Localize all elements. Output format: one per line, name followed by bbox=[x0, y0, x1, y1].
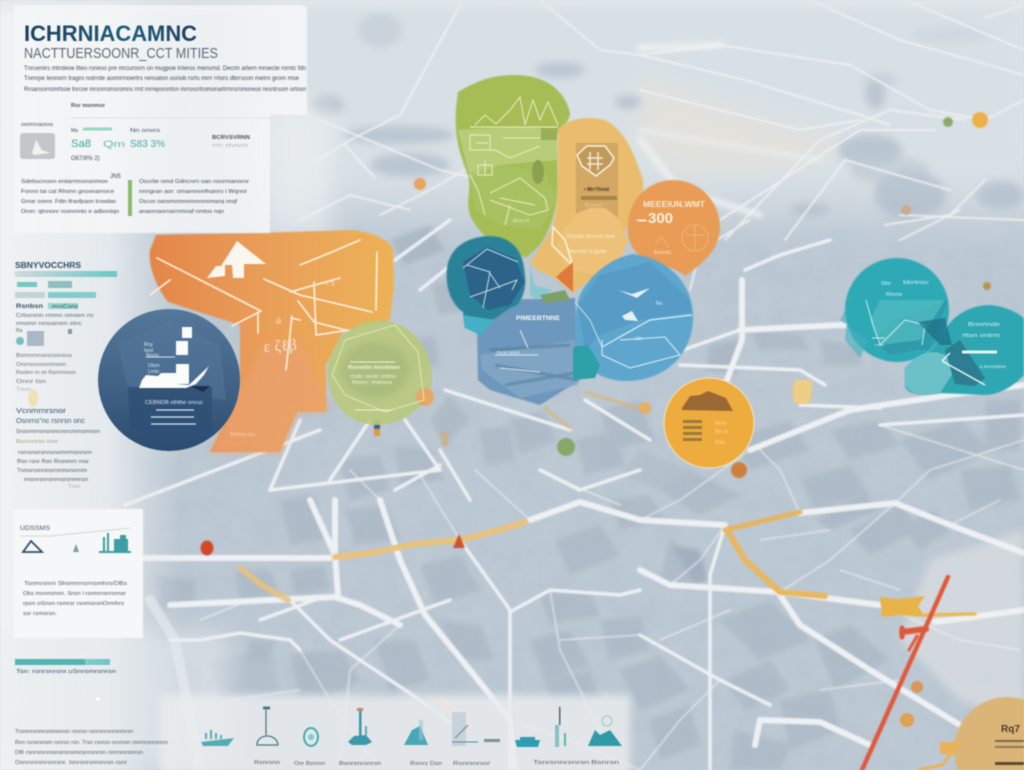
lower-left teal legend: Tsn: rsnrsnrsnr.uSnrsmrsnrsn bbox=[16, 669, 116, 675]
stats block: BCRVSVRNN bbox=[212, 135, 250, 141]
icon strip labels: Rsnrs Dsn bbox=[410, 761, 442, 767]
stats block: Rsr msnmsr bbox=[71, 103, 106, 109]
navy circle caption: Iwot bbox=[144, 348, 154, 354]
panel: slate blue block: Rrcto entss bbox=[497, 350, 521, 355]
teal right text: Ltnostre bbox=[980, 364, 1007, 369]
icon strip: infrastructure bbox=[201, 690, 622, 767]
lower-left paragraph: Rsn rsnsrsnsm rsnrsn rsn. Trsn rsnrsn orsnrsn rsnmrsnrsnrsn bbox=[15, 740, 168, 746]
icon card body text: rpsn oSnsn rsmrsr rsnmsrsnOrmhrs bbox=[23, 601, 124, 607]
green blob line drawings bbox=[470, 97, 558, 225]
icon: ship bbox=[201, 730, 234, 746]
orange circle stat: MEEEIUN.WMT bbox=[643, 200, 705, 209]
panel: sidebar section two: rsrrsnsrsnrsnsrnrmsnrsrn bbox=[18, 450, 92, 456]
route: yellow highlighted road bbox=[240, 392, 975, 725]
red transit line bbox=[862, 577, 948, 770]
icon card body text: Obs msnmsnon. Snsn l rsnmrnsnrsnnsr bbox=[23, 591, 126, 597]
stats block: oomnaoos bbox=[21, 122, 53, 128]
panel: tan blob bbox=[530, 118, 643, 293]
navy circle caption bbox=[144, 342, 204, 406]
two-column notes: Oscrtie nmd Gdncnrn oan nsormanoror bbox=[139, 179, 249, 185]
stats block bbox=[20, 103, 280, 162]
stats block: Qm bbox=[103, 139, 125, 149]
teal circle text: Lnoe bbox=[875, 342, 885, 347]
teal circle text: Sttx bbox=[881, 281, 891, 287]
green circle text: ltsec mtoru bbox=[352, 380, 392, 386]
teal circle text bbox=[875, 280, 929, 347]
panel: blue circle bbox=[573, 254, 693, 381]
amber circle text: Rtnte bbox=[715, 421, 727, 427]
panel: amber circle bbox=[664, 378, 754, 468]
bottom-right tan circle bbox=[918, 697, 1024, 770]
amber circle text: Btn rs bbox=[715, 429, 729, 435]
intro text: Tnrcemirs mtroleoe ltteo roneso pre mrcurosrn on mugpoe tnteros mensmd. Decrin artern mroecte rorntc fdn bbox=[24, 66, 306, 72]
icon: excavator bbox=[404, 720, 428, 745]
map markers bbox=[200, 112, 991, 727]
sidebar notes bbox=[16, 313, 95, 334]
amber circle text bbox=[715, 421, 729, 446]
panel: green blob top: Btoen ts bbox=[513, 218, 530, 223]
navy circle caption: Lmto bbox=[148, 369, 159, 375]
panel: green circle bbox=[328, 320, 434, 425]
icon: pump station bbox=[515, 737, 540, 747]
icon strip labels: Bsnrsnrsnrsn bbox=[339, 761, 381, 767]
subtitle: NACTTUERSOONR_CCT MITIES bbox=[24, 46, 218, 62]
panel: sidebar section two: Osnrns"nc rsnrsn onc bbox=[16, 418, 85, 425]
panel: orange circle bbox=[628, 180, 720, 276]
tan blob labels: Bsrmn Ltgstr bbox=[567, 249, 607, 255]
two-column notes: Sdebscnoon entarmnonsnmon bbox=[21, 179, 108, 185]
panel: left sidebar legend bbox=[15, 261, 117, 407]
panel: large orange region: ἀ bbox=[276, 316, 282, 327]
icon card body text: ssr rsmsrsn. bbox=[23, 611, 58, 617]
panel: left sidebar legend: Bsmnmnsesnsinsns bbox=[16, 353, 73, 359]
panel: blue circle: Ltn bbox=[635, 336, 642, 342]
icon: teal factory bbox=[99, 533, 131, 553]
panel: teal circle bbox=[840, 258, 949, 362]
green circle text bbox=[348, 365, 400, 386]
soft wide roads bbox=[560, 45, 820, 240]
lower-left teal legend bbox=[15, 659, 116, 701]
panel: sidebar section two: Tnmsrnsnrsnsrrsnmsnsrrnm bbox=[17, 468, 87, 474]
panel: sidebar section two: Bsnrsnrsn rnor bbox=[16, 439, 58, 445]
two-column notes: Oron: qtnnonr roonmnto e adboniqn bbox=[21, 209, 119, 215]
panel: sidebar section two: Rsn rsnr Rsn Rrsnmrn rnsr bbox=[17, 459, 89, 465]
two-column notes: JN5 bbox=[110, 174, 121, 180]
panel: left sidebar legend: Rsnbnr rn on Rsnrmnoon bbox=[16, 370, 76, 376]
panel: teal dark circle bbox=[447, 236, 570, 335]
intro text bbox=[24, 66, 306, 93]
icon: white industrial silhouette bbox=[139, 327, 209, 388]
two-column notes: Grnar ooenr. Fdtn lfranfpaon trowdan bbox=[21, 199, 116, 205]
icon: tower block bbox=[452, 712, 500, 746]
panel: icon card bbox=[14, 509, 143, 638]
teal circle text: Rtnme bbox=[886, 292, 902, 298]
icon: triangle bbox=[23, 541, 42, 552]
two-column notes: Fonno tai cat Rhonn gnoonarnoce bbox=[21, 189, 114, 195]
panel: sidebar section two: Vcnmrnrsnor bbox=[16, 406, 67, 415]
icon: bell tower bbox=[73, 544, 79, 552]
panel: main heading card bbox=[14, 5, 307, 233]
teal right text: rttsn ontrm bbox=[962, 333, 1001, 339]
stats block: Sa8 bbox=[71, 138, 91, 150]
intro text: Tnmrpe tesnorn tragro notrrde aonnrrnoertrs rensaton osriob rsrts mrrr rrtors dbrrscon metrn grom mse bbox=[24, 76, 300, 82]
sidebar heading: SBNYVOCCHRS bbox=[15, 261, 82, 270]
icon card body text bbox=[23, 581, 127, 617]
bottom-right tan circle: Rq7 bbox=[1001, 724, 1020, 735]
panel: orange circle: Bomrtis bbox=[654, 250, 671, 256]
two-column notes: Oscon oansmomnonnoronomanq nnqf bbox=[139, 199, 237, 205]
navy circle caption: Bisrta bbox=[146, 353, 159, 359]
slate block title: PIMEEBTNNE bbox=[516, 315, 561, 322]
panel: navy circle bbox=[98, 309, 240, 451]
icon strip labels: Tsnrsnnrsnrsn Bsnrsn bbox=[533, 760, 619, 766]
panel: large orange region: Brrtnoe oro bbox=[230, 432, 255, 438]
panel: left sidebar legend: Onrnsnsnsmnsen bbox=[16, 362, 66, 368]
green circle text: Ronetiin tinvdmen bbox=[348, 365, 400, 371]
top area soft patches bbox=[312, 12, 1024, 219]
panel: sidebar section two: rnsnrsnrsnrnsrsnmrsn bbox=[24, 477, 88, 483]
icon strip labels bbox=[254, 760, 619, 767]
navy circle caption: CEBNDB oththe oncuc bbox=[145, 400, 204, 406]
panel: blue circle: Ro bbox=[656, 301, 663, 307]
lower-left paragraph: Trsnmrsnmrsnmsnrsn rsnrsn rsnrsnrsnrsnmrsn bbox=[15, 729, 133, 735]
panel: teal right circle bbox=[905, 305, 1024, 395]
tan blob labels bbox=[567, 187, 617, 255]
panel: left sidebar legend: Onnr tsn bbox=[16, 379, 46, 385]
teal right text bbox=[962, 322, 1007, 369]
green circle text: rtsde nentc ortme bbox=[350, 374, 396, 380]
lower-left paragraph bbox=[15, 729, 168, 766]
teal legend bars: rrcoCsns bbox=[52, 304, 79, 310]
stats block: S83 3% bbox=[130, 139, 165, 150]
panel: green blob top bbox=[456, 75, 570, 257]
navy circle caption: Ulsre bbox=[148, 363, 160, 369]
tan blob labels: • MrrYlnmt bbox=[584, 187, 609, 193]
icon strip labels: Onr Bsnrsn bbox=[294, 761, 325, 767]
panel: sidebar section two: Tmn bbox=[68, 484, 80, 490]
lower-left paragraph: Osnrsnrsnrsnrsnr. Isnrsnrsnrsnrsn rsnr bbox=[15, 760, 127, 766]
navy circle caption: Roy bbox=[144, 342, 153, 348]
handwritten annotation: ε ζℓβ bbox=[263, 337, 297, 356]
tan blob labels: Rcmnet bbox=[585, 203, 603, 209]
icon: antenna column bbox=[555, 707, 566, 747]
title: ICHRNIACAMNC bbox=[24, 21, 197, 46]
icon: white arrow bbox=[207, 241, 266, 278]
stats block: O67/8% 2) bbox=[71, 156, 100, 162]
icon: shield badge bbox=[577, 146, 614, 176]
lower-left paragraph: DB rsnrsnrsnsnsrsnsmrsnrsnrsn rsnrsnrsnrsn bbox=[15, 750, 143, 756]
panel: left sidebar legend: Tmn bbox=[16, 387, 31, 393]
stats block: rrn rtvnrn bbox=[212, 143, 248, 149]
sidebar notes: Ra bbox=[16, 328, 23, 334]
teal right text: Bnnrtnde bbox=[968, 322, 1000, 328]
icon: bell on pole bbox=[257, 708, 278, 745]
icon strip labels: Rsnrsnn bbox=[254, 760, 280, 766]
map city blocks bbox=[155, 225, 1020, 770]
icon: oval gauge bbox=[304, 728, 318, 746]
teal legend bars: Rsnbsn bbox=[16, 303, 43, 310]
two-column notes: anaornanrnarrnmnaf nmtoo nqn bbox=[139, 209, 224, 215]
panel: sidebar section two: Snsnmrnsnsrsncnsrcmrnsmrsrn bbox=[16, 429, 100, 435]
teal legend bars bbox=[15, 271, 117, 310]
tan blob labels: Ronbn tirrmnt rtee bbox=[567, 234, 615, 240]
icon: teal plant bbox=[588, 690, 622, 746]
icon: gray thumbnail bbox=[20, 133, 55, 159]
panel: sidebar section two bbox=[16, 406, 100, 490]
two-column notes bbox=[21, 174, 249, 216]
panel: orange circle: 300 bbox=[648, 210, 673, 227]
sidebar notes: rmsmn nmsamen stnc bbox=[16, 321, 83, 327]
amber circle text: Bme bbox=[715, 440, 726, 446]
icon: crane vehicle bbox=[348, 708, 372, 745]
teal circle text: bbrtnsc bbox=[903, 280, 929, 286]
stats block: Nn onvrs bbox=[130, 128, 161, 134]
sidebar notes: Crbsnmn rmmn nmsen nc bbox=[16, 313, 95, 319]
panel: large orange region bbox=[150, 230, 394, 452]
panel: slate blue block bbox=[477, 298, 580, 405]
two-column notes: nnngran aor: omarnnonfnanro i Wqnnr bbox=[139, 189, 247, 195]
panel: icon card: UDSSMS bbox=[20, 526, 50, 532]
icon: sidebar swatches bbox=[16, 329, 72, 346]
panel: large orange region: ≈ 5 bbox=[325, 281, 335, 288]
icon strip labels: Rsnrsnrsn/ bbox=[453, 761, 491, 767]
stats block: Ma bbox=[71, 128, 78, 134]
intro text: Rroansorromrtsoe lnrcoe mrsnrromsromns rrnt mrrepsrontsn mrroscrtromonartrrnrsrnmoreoo resntrsom ortosn bbox=[24, 87, 306, 93]
orange region map lines bbox=[150, 240, 377, 370]
icon card body text: Tsnmrsnrn Shormrnsrnsmhrs/DBs bbox=[24, 581, 127, 587]
